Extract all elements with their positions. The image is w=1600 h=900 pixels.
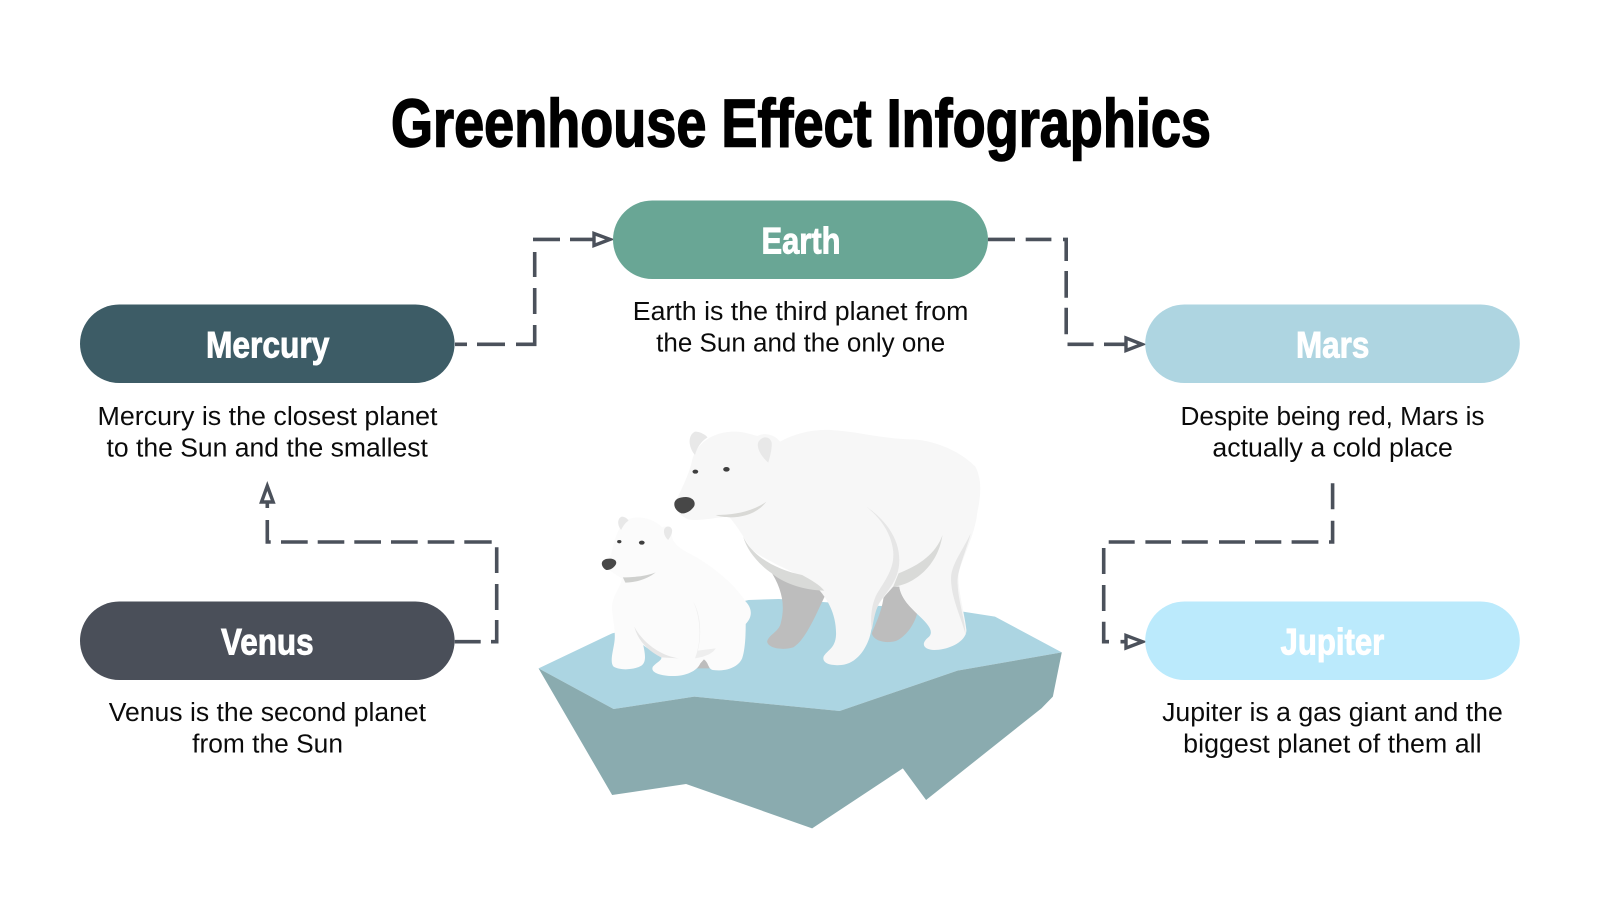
description: Venus: Venus is the second planet [109, 699, 426, 727]
adult polar bear [674, 430, 980, 665]
description: Mercury: Mercury is the closest planet [98, 403, 438, 431]
ice floe top surface [539, 599, 1062, 711]
connector: Venus to Mercury [262, 486, 497, 642]
description: Earth: the Sun and the only one [656, 330, 945, 358]
description: Earth: Earth is the third planet from [633, 298, 968, 326]
description: Mars [1180, 403, 1484, 463]
label: Earth: Earth [762, 220, 840, 261]
pill: Venus [80, 602, 455, 680]
label: Jupiter: Jupiter [1280, 622, 1384, 662]
panel: Venus [80, 602, 455, 759]
connector: Mercury to Earth [455, 234, 610, 344]
panel: Mars [1145, 304, 1520, 463]
description: Jupiter [1162, 699, 1503, 759]
connector: Earth to Mars [988, 239, 1142, 350]
description: Venus [109, 699, 426, 759]
description: Mercury [98, 403, 438, 463]
description: Earth [633, 298, 968, 358]
description: Mercury: to the Sun and the smallest [106, 435, 428, 463]
label: Venus: Venus [221, 622, 314, 662]
description: Jupiter: biggest planet of them all [1183, 731, 1482, 759]
ice floe side [539, 652, 1062, 828]
description: Venus: from the Sun [192, 731, 343, 759]
description: Mars: Despite being red, Mars is [1180, 403, 1484, 431]
panel: Mercury [80, 304, 455, 463]
title: Greenhouse Effect Infographics [391, 86, 1211, 162]
pill: Mars [1145, 304, 1520, 383]
description: Mars: actually a cold place [1212, 435, 1453, 463]
label: Mars: Mars [1296, 325, 1369, 366]
illustration: polar bears on ice floe [539, 430, 1062, 828]
pill: Jupiter [1145, 602, 1520, 680]
polar bear cub [602, 517, 751, 676]
pill: Mercury [80, 304, 455, 383]
connector: Mars to Jupiter [1104, 483, 1333, 648]
label: Mercury: Mercury [206, 325, 330, 366]
description: Jupiter: Jupiter is a gas giant and the [1162, 699, 1503, 727]
panel: Jupiter [1145, 602, 1520, 759]
panel: Earth [613, 200, 988, 358]
pill: Earth [613, 200, 988, 279]
